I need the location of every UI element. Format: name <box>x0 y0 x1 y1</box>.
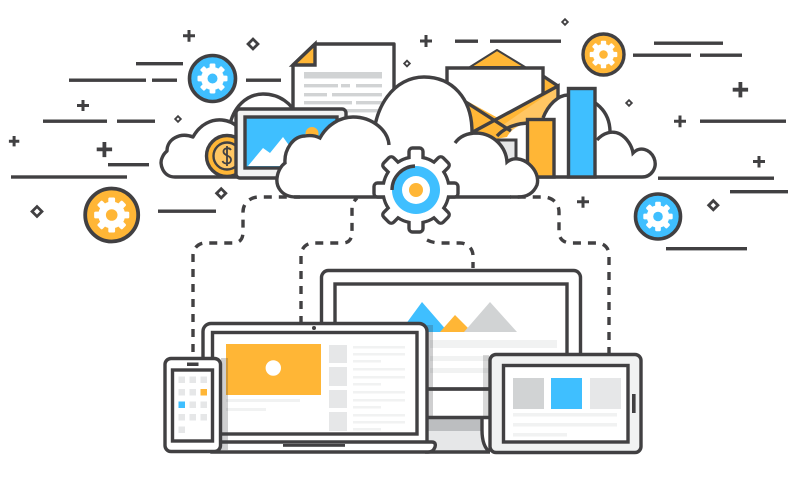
decorative lines right <box>455 40 788 250</box>
icon: central gear <box>374 148 458 232</box>
icon: orange gear badge top right <box>583 34 624 75</box>
icon: blue gear badge right <box>636 194 680 239</box>
decorative lines left <box>11 62 281 213</box>
icon: orange gear badge left <box>85 188 138 242</box>
envelope <box>447 50 558 140</box>
bar: orange <box>528 120 554 177</box>
right cloud <box>510 132 655 177</box>
back cloud behind photo <box>229 94 297 170</box>
video placeholder <box>226 344 321 395</box>
tablet <box>490 354 641 452</box>
photo frame <box>236 109 346 178</box>
right back cloud small arcs <box>490 95 610 177</box>
dashed connector lines <box>193 197 609 355</box>
bar: blue <box>568 88 595 177</box>
small gray screen behind cloud <box>495 140 516 170</box>
left cloud <box>161 120 242 177</box>
icon: blue gear badge top left <box>190 56 236 102</box>
document <box>293 44 394 175</box>
central large cloud <box>373 77 472 170</box>
plus signs <box>9 30 765 208</box>
phone <box>165 358 228 452</box>
front cloud <box>277 117 538 197</box>
coin <box>206 136 248 176</box>
laptop <box>203 324 435 452</box>
monitor <box>322 270 580 452</box>
laptop base <box>212 442 435 452</box>
diamonds <box>32 19 718 216</box>
